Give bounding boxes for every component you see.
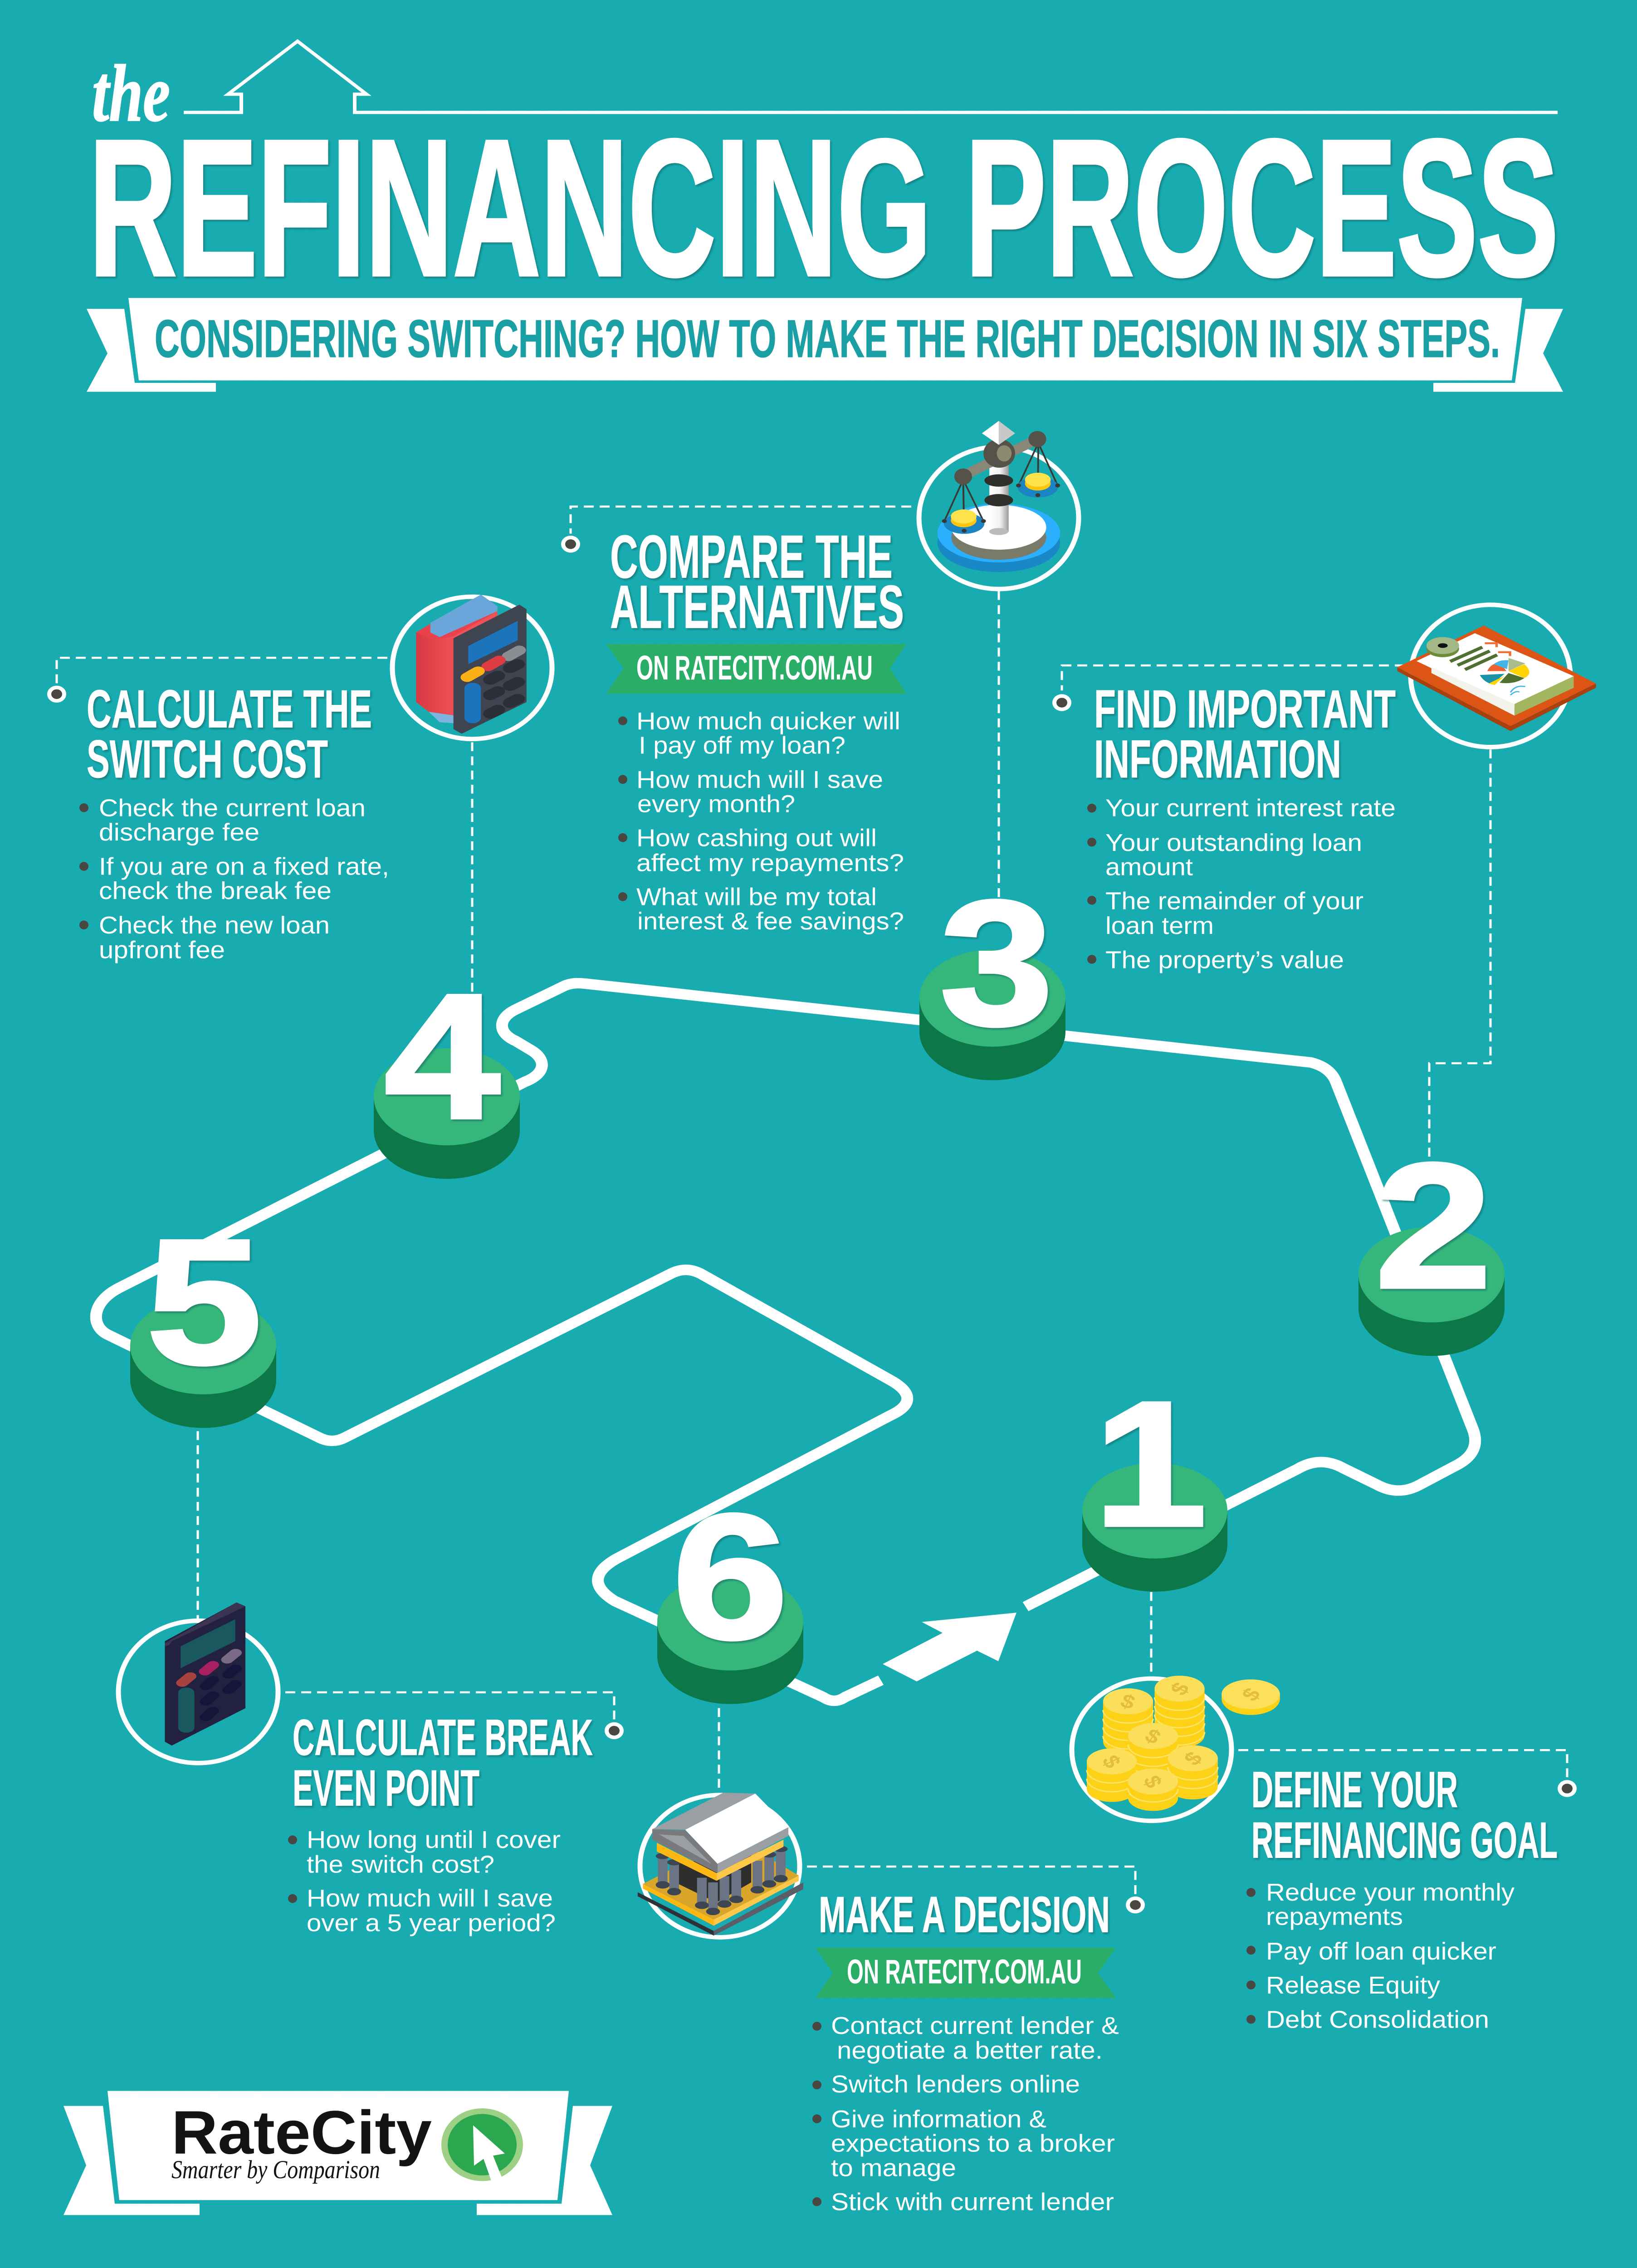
icon: gold coin stacks: $ — [1179, 1748, 1207, 1769]
step marker 4 — [374, 958, 520, 1179]
panel: step 2 find important information — [1052, 605, 1596, 1160]
panel: step 5 calculate break even point — [118, 1431, 624, 1937]
bullet list: Check the current loan — [99, 795, 366, 822]
bullet list: Switch lenders online — [831, 2071, 1080, 2098]
bullet list: amount — [1105, 854, 1193, 881]
panel: step 3 compare the alternatives — [561, 421, 1079, 935]
bullet list: How long until I cover — [307, 1827, 561, 1853]
bullet list: to manage — [831, 2155, 956, 2182]
icon: gold coin stacks: $ — [1097, 1752, 1126, 1772]
bullet list — [618, 708, 904, 935]
bullet list: Your outstanding loan — [1105, 830, 1362, 856]
bullet list: Stick with current lender — [831, 2189, 1114, 2216]
bullet list: Pay off loan quicker — [1266, 1938, 1496, 1965]
heading: CALCULATE THE — [87, 679, 372, 739]
heading — [87, 679, 372, 789]
word: the: the — [92, 49, 170, 138]
heading: DEFINE YOUR — [1251, 1761, 1458, 1818]
ribbon: on ratecity: ON RATECITY.COM.AU — [636, 649, 873, 687]
bullet list: How much quicker will — [636, 708, 900, 735]
bullet list: The remainder of your — [1105, 888, 1363, 915]
icon: gold coin stacks: $ — [1117, 1690, 1139, 1714]
bullet list: How much will I save — [307, 1885, 553, 1912]
logo icon: cursor in circle — [441, 2108, 523, 2187]
icon: book and calculator — [416, 595, 527, 734]
bullet list: Give information & — [831, 2106, 1046, 2133]
bullet list: expectations to a broker — [831, 2130, 1115, 2157]
bullet list: What will be my total — [636, 884, 877, 911]
icon: clipboard with pie chart — [1397, 626, 1596, 731]
bullet list: Check the new loan — [99, 912, 330, 939]
bullet list — [288, 1827, 561, 1937]
step marker 6: 6 — [673, 1478, 788, 1676]
bullet list — [79, 795, 389, 964]
heading: MAKE A DECISION — [819, 1887, 1110, 1943]
bullet list: Contact current lender & — [831, 2013, 1119, 2039]
heading — [1251, 1761, 1558, 1869]
heading — [1094, 679, 1396, 789]
panel: step 1 define your refinancing goal — [1072, 1592, 1577, 2033]
icon: bank building — [638, 1793, 803, 1936]
bullet list: Release Equity — [1266, 1972, 1441, 1999]
ribbon: on ratecity — [816, 1948, 1116, 1998]
bullet list: negotiate a better rate. — [837, 2037, 1103, 2064]
icon: gold coin stacks — [1087, 1676, 1280, 1811]
bullet list: over a 5 year period? — [307, 1910, 556, 1937]
icon: gold coin stacks: $ — [1140, 1725, 1165, 1749]
heading: SWITCH COST — [87, 730, 328, 789]
ribbon: on ratecity — [606, 644, 906, 694]
step marker 3 — [919, 864, 1065, 1080]
bullet list: Your current interest rate — [1105, 795, 1396, 822]
bullet list — [1246, 1879, 1515, 2033]
route arrow — [883, 1613, 1016, 1681]
bullet list: Debt Consolidation — [1266, 2007, 1489, 2033]
route path — [96, 983, 1475, 1701]
icon: gold coin stacks: $ — [1237, 1684, 1266, 1705]
icon: gold coin stacks: $ — [1165, 1679, 1195, 1699]
step marker 2: 2 — [1375, 1127, 1492, 1325]
step marker 5: 5 — [147, 1203, 262, 1401]
heading — [293, 1709, 593, 1817]
step marker 4: 4 — [385, 958, 501, 1156]
subtitle ribbon — [87, 298, 1563, 392]
bullet list: Reduce your monthly — [1266, 1879, 1515, 1906]
house outline rule — [184, 41, 1558, 112]
heading: FIND IMPORTANT — [1094, 679, 1396, 739]
logo ribbon: RateCity — [64, 2091, 612, 2215]
bullet list: upfront fee — [99, 937, 225, 964]
heading: ALTERNATIVES — [610, 573, 904, 641]
bullet list: check the break fee — [99, 878, 332, 904]
heading: COMPARE THE — [610, 523, 893, 591]
step marker 3: 3 — [940, 864, 1053, 1062]
step marker 1 — [1082, 1365, 1227, 1592]
bullet list: loan term — [1105, 913, 1214, 939]
ribbon: on ratecity: ON RATECITY.COM.AU — [847, 1953, 1082, 1991]
icon: dark calculator — [165, 1603, 245, 1745]
panel: step 4 calculate the switch cost — [47, 595, 552, 992]
bullet list: the switch cost? — [307, 1851, 494, 1878]
bullet list: every month? — [637, 791, 795, 818]
bullet list: discharge fee — [99, 819, 259, 846]
bullet list — [812, 2013, 1119, 2216]
logo tagline: Smarter by Comparison — [171, 2156, 380, 2184]
heading: INFORMATION — [1094, 730, 1341, 789]
icon: gold coin stacks: $ — [1138, 1772, 1167, 1791]
step marker 1: 1 — [1094, 1365, 1207, 1563]
bullet list: repayments — [1266, 1903, 1403, 1931]
bullet list: How much will I save — [636, 767, 883, 793]
panel: step 6 make a decision — [638, 1708, 1145, 2216]
heading: EVEN POINT — [293, 1760, 479, 1817]
heading — [610, 523, 904, 641]
bullet list: If you are on a fixed rate, — [99, 854, 389, 880]
bullet list: The property’s value — [1105, 947, 1344, 974]
logo wordmark: RateCity — [171, 2098, 432, 2167]
heading: CALCULATE BREAK — [293, 1709, 593, 1766]
step marker 5 — [130, 1203, 276, 1428]
icon: balance scales — [938, 421, 1060, 572]
bullet list: affect my repayments? — [636, 850, 904, 877]
bullet list: I pay off my loan? — [639, 732, 845, 759]
step marker 6 — [657, 1478, 803, 1704]
bullet list: interest & fee savings? — [637, 908, 904, 935]
step marker 2 — [1358, 1127, 1505, 1356]
bullet list — [1087, 795, 1396, 974]
bullet list: How cashing out will — [636, 825, 877, 852]
